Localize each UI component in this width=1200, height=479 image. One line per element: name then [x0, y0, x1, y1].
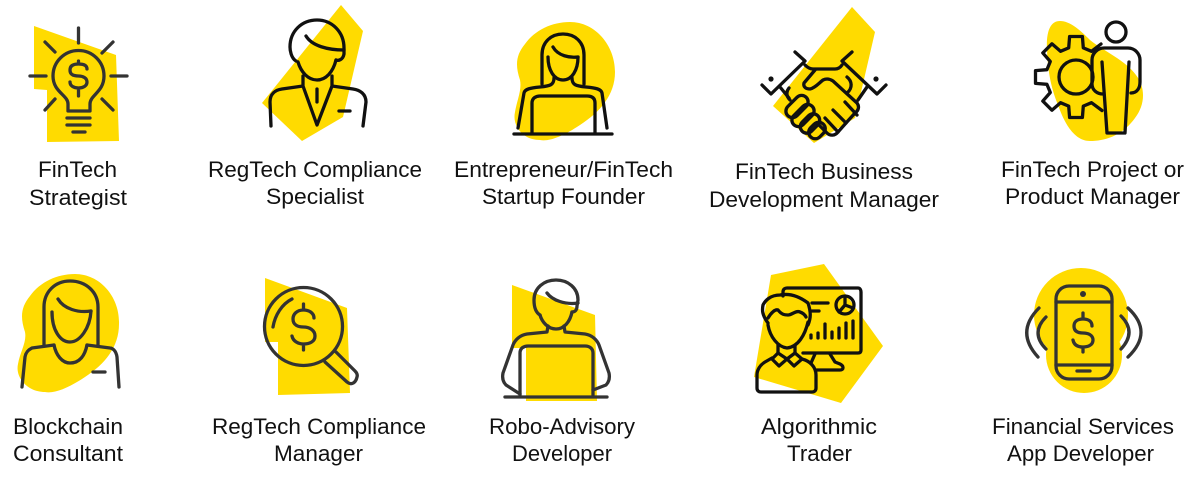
label: RegTech Compliance Manager: RegTech Compliance — [212, 414, 426, 439]
label: Entrepreneur/FinTech Startup Founder — [454, 157, 673, 209]
icon: magnifier with dollar — [264, 278, 357, 395]
label: Algorithmic Trader: Trader — [787, 441, 853, 466]
icon: light bulb with dollar — [30, 26, 127, 142]
label: RegTech Compliance Specialist: Specialist — [266, 184, 365, 209]
icon: woman — [18, 274, 119, 392]
label: Financial Services App Developer: App Developer — [1007, 441, 1155, 466]
label: FinTech Strategist: FinTech — [38, 157, 117, 182]
label: FinTech Business Development Manager: Development Manager — [709, 187, 939, 212]
label: RegTech Compliance Specialist — [208, 157, 422, 209]
icon: smartphone with dollar — [1027, 268, 1141, 393]
label: FinTech Project or Product Manager — [1001, 157, 1185, 209]
label: Entrepreneur/FinTech Startup Founder: Startup Founder — [482, 184, 645, 209]
label: Financial Services App Developer: Financial Services — [992, 414, 1174, 439]
panel: FinTech Project or Product Manager — [1001, 21, 1185, 209]
panel: Financial Services App Developer — [992, 268, 1174, 466]
panel: RegTech Compliance Manager — [212, 278, 426, 466]
panel: Blockchain Consultant — [13, 274, 124, 466]
icon: businessman — [262, 5, 366, 141]
label: Blockchain Consultant: Blockchain — [13, 414, 123, 439]
label: FinTech Project or Product Manager: Product Manager — [1005, 184, 1180, 209]
label: FinTech Strategist: Strategist — [29, 185, 128, 210]
label: RegTech Compliance Manager — [212, 414, 426, 466]
label: RegTech Compliance Specialist: RegTech Compliance — [208, 157, 422, 182]
panel: Robo-Advisory Developer — [489, 280, 636, 466]
panel: RegTech Compliance Specialist — [208, 5, 422, 209]
label: Financial Services App Developer — [992, 414, 1174, 466]
icon: woman at laptop — [514, 22, 615, 140]
panel: Entrepreneur/FinTech Startup Founder — [454, 22, 673, 209]
label: RegTech Compliance Manager: Manager — [274, 441, 363, 466]
panel: FinTech Strategist — [29, 26, 128, 210]
icon: handshake — [762, 7, 886, 143]
label: Entrepreneur/FinTech Startup Founder: Entrepreneur/FinTech — [454, 157, 673, 182]
label: Blockchain Consultant — [13, 414, 124, 466]
label: FinTech Project or Product Manager: FinTech Project or — [1001, 157, 1185, 182]
label: Robo-Advisory Developer: Robo-Advisory — [489, 414, 636, 439]
label: Robo-Advisory Developer: Developer — [512, 441, 612, 466]
panel: Algorithmic Trader — [754, 264, 883, 466]
label: Algorithmic Trader — [761, 414, 877, 466]
panel: FinTech Business Development Manager — [709, 7, 939, 212]
label: FinTech Business Development Manager: FinTech Business — [735, 159, 913, 184]
label: Robo-Advisory Developer — [489, 414, 636, 466]
icon: trader and monitor — [754, 264, 883, 403]
label: Blockchain Consultant: Consultant — [13, 441, 124, 466]
label: Algorithmic Trader: Algorithmic — [761, 414, 877, 439]
icon: person with gear — [1036, 21, 1143, 141]
icon: man at laptop — [503, 280, 609, 401]
label: FinTech Business Development Manager — [709, 159, 939, 212]
label: FinTech Strategist — [29, 157, 128, 210]
